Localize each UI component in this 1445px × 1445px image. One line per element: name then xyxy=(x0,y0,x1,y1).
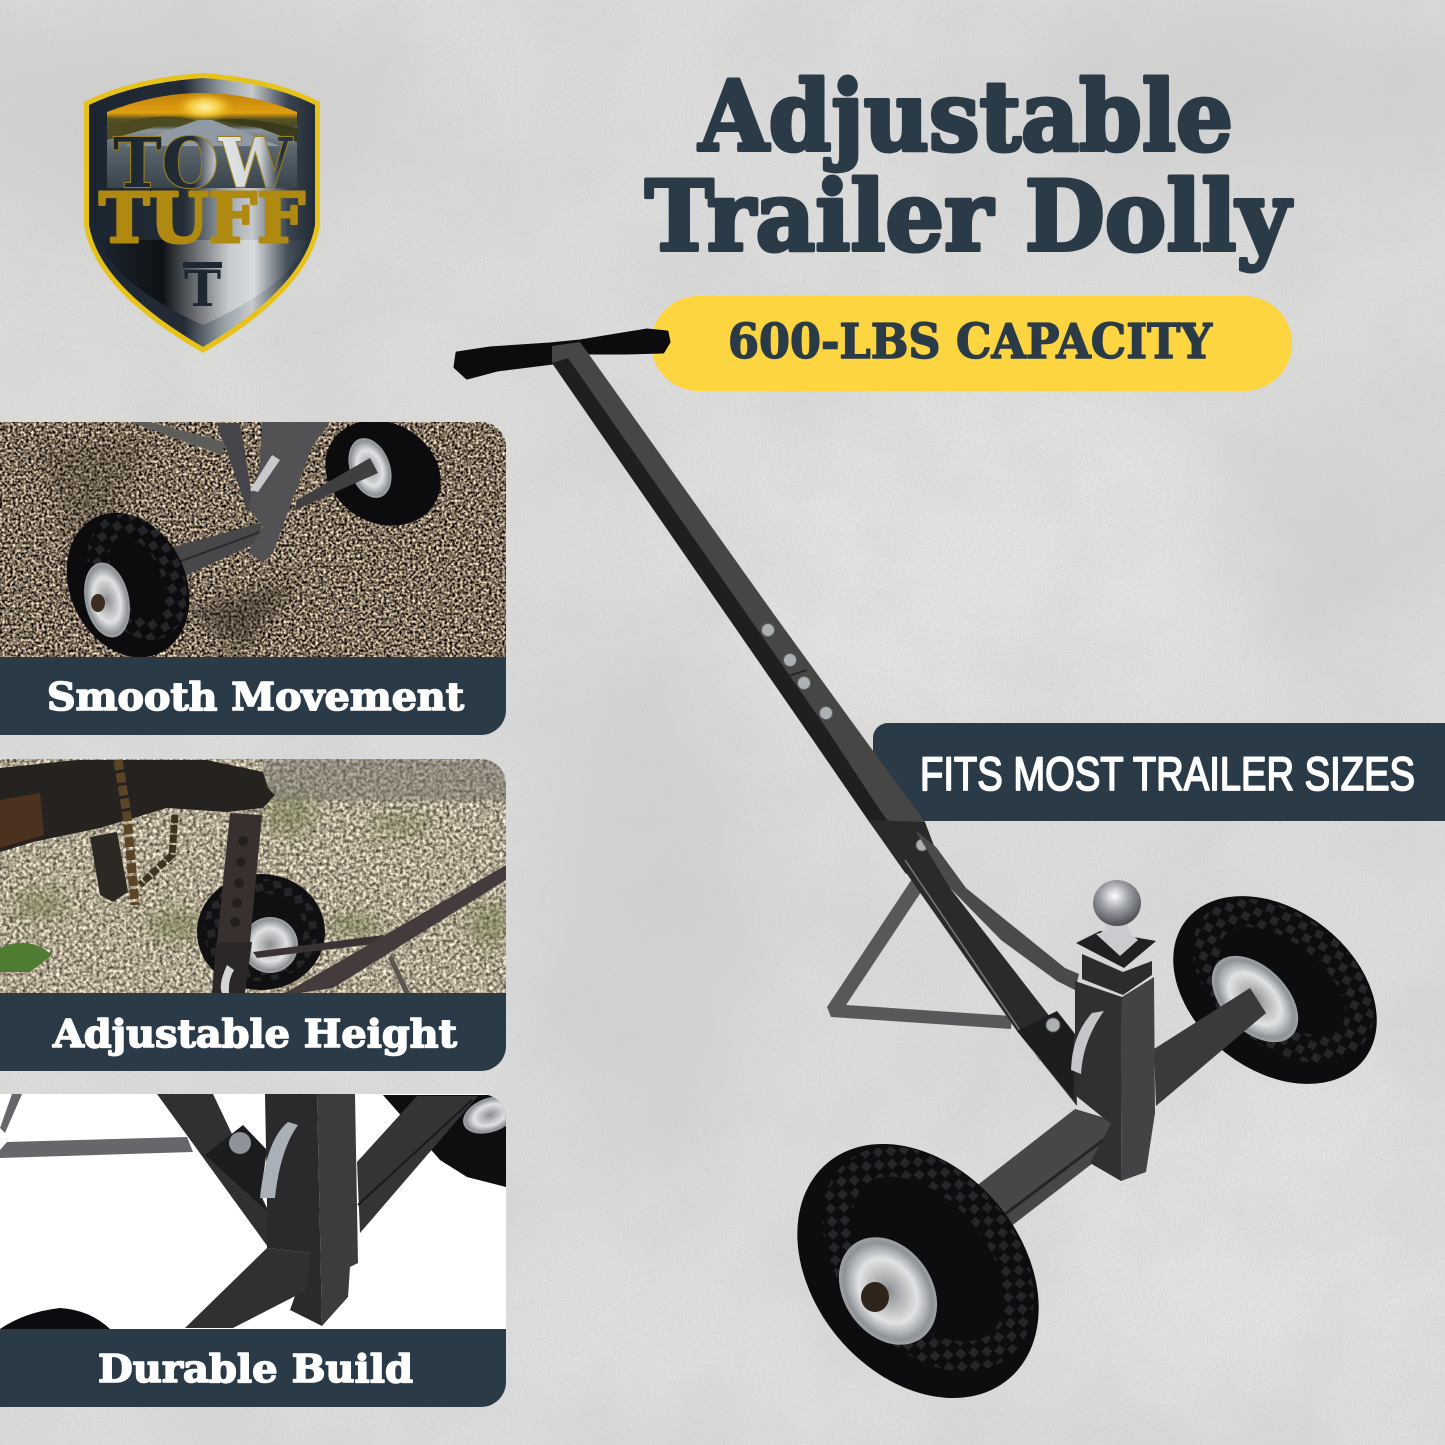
support strap xyxy=(915,830,1079,990)
label text: Durable Build xyxy=(98,1346,413,1391)
product: trailer dolly xyxy=(455,330,1413,1445)
label band xyxy=(0,657,506,735)
title: Trailer Dolly xyxy=(645,160,1293,273)
callout: fits most trailer sizes xyxy=(873,723,1445,821)
bolts on shaft xyxy=(762,624,1060,1032)
lower shaft tube xyxy=(868,820,1077,1106)
bolt bracket xyxy=(1017,1011,1075,1098)
photo: frame close-up xyxy=(0,1089,522,1329)
logo wordmark TUFF: TUFF xyxy=(99,179,305,259)
folding stand triangle xyxy=(827,879,1012,1029)
handle shaft xyxy=(552,342,1077,1106)
hitch post xyxy=(1071,931,1156,1181)
front axle xyxy=(970,1109,1112,1231)
logo: Tow Tuff shield xyxy=(84,73,320,353)
panel: durable build xyxy=(0,1089,522,1407)
capacity pill: 600-LBS CAPACITY xyxy=(728,314,1213,370)
label text: Smooth Movement xyxy=(47,674,464,719)
hitch ball xyxy=(1093,880,1141,956)
handle grip xyxy=(455,330,669,378)
label band xyxy=(0,993,506,1071)
logo wordmark TOW: TOW xyxy=(113,124,294,204)
photo: dolly under trailer coupler xyxy=(0,759,512,993)
panel: adjustable height xyxy=(0,759,512,1071)
title: Adjustable xyxy=(698,60,1233,173)
capacity pill xyxy=(651,296,1292,391)
logo sunrise window xyxy=(107,88,297,188)
logo emblem T: T xyxy=(184,259,221,318)
photo: dolly on gravel xyxy=(0,422,506,657)
label band xyxy=(0,1329,506,1407)
rear wheel xyxy=(1137,857,1413,1123)
label text: Adjustable Height xyxy=(52,1011,457,1056)
rear axle xyxy=(1154,988,1266,1106)
panel: smooth movement xyxy=(0,400,506,735)
title xyxy=(645,60,1293,273)
front wheel xyxy=(748,1096,1088,1445)
